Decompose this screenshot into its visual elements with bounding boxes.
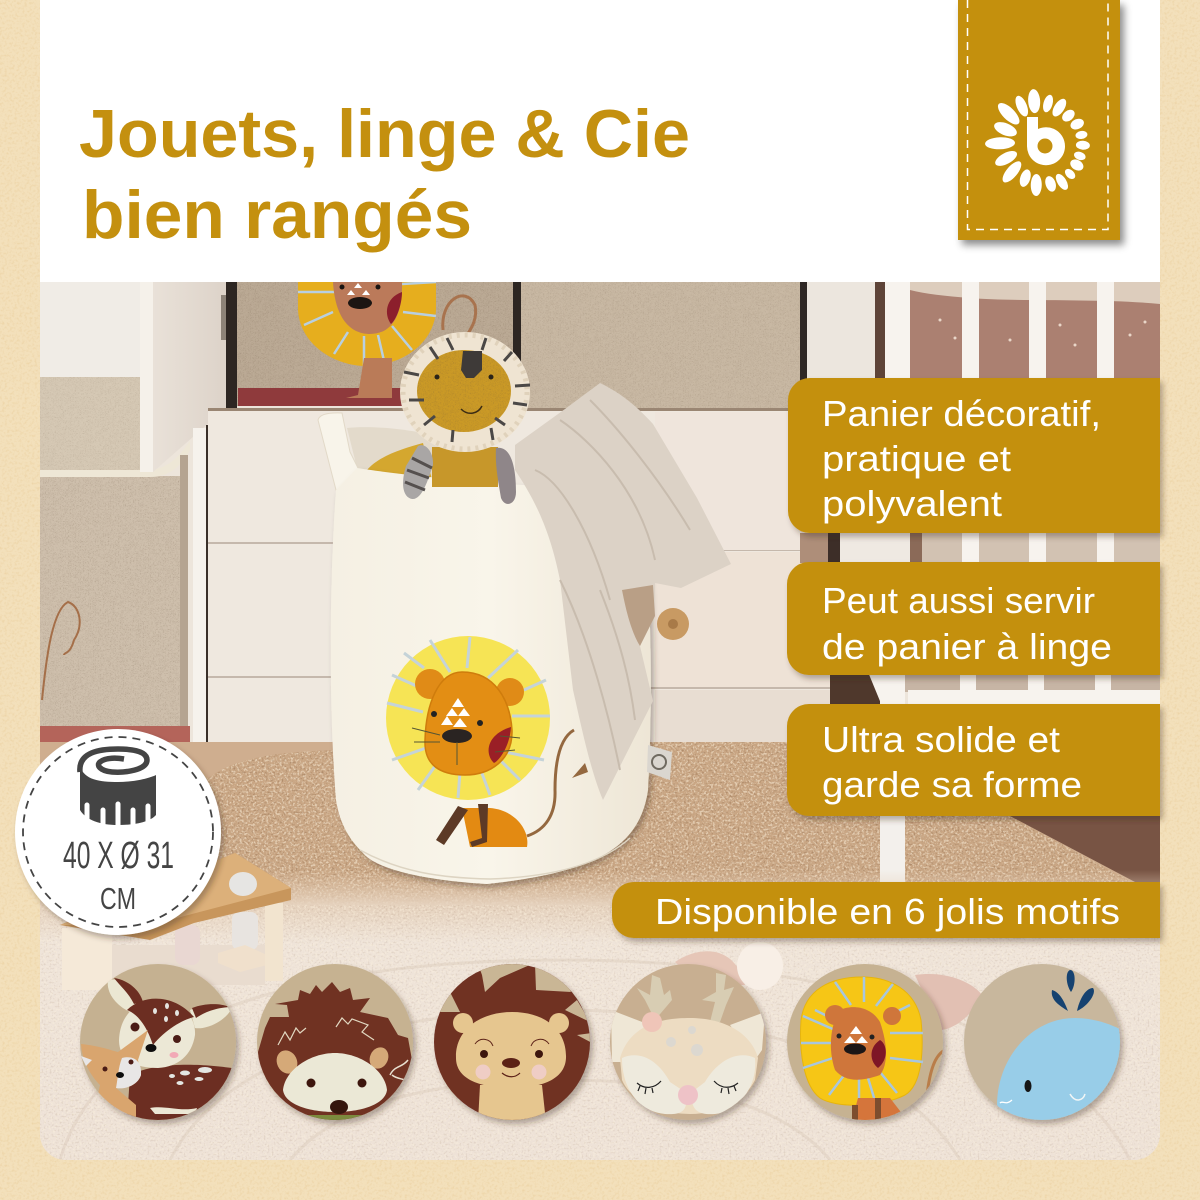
- crib leg: [880, 816, 905, 882]
- motifs row: [80, 964, 1122, 1122]
- basket lion face: [412, 669, 524, 775]
- wall and cabinet backdrop: [40, 406, 1160, 1160]
- dimensions text: CM: [100, 881, 136, 916]
- label: decorative: [788, 378, 1160, 533]
- top storage box with lion: [226, 282, 513, 408]
- jute rug: [40, 742, 1131, 914]
- label: six motifs: [612, 882, 1160, 938]
- wood floor: [40, 742, 1160, 882]
- wooden toy: [60, 853, 291, 990]
- motif: whale: [964, 964, 1122, 1122]
- label: six motifs: Disponible en 6 jolis motifs: [655, 891, 1120, 932]
- left cabinet interior: [40, 282, 140, 472]
- motif: fawn: [610, 964, 766, 1120]
- door panel: [140, 282, 227, 472]
- label: sturdy: [787, 704, 1160, 816]
- left fabric box: [40, 441, 190, 742]
- icon: measuring tape: [80, 749, 156, 826]
- white header band: [40, 0, 1160, 282]
- motif: hedgehog bear: [434, 964, 592, 1122]
- top right storage box: [513, 282, 807, 410]
- motif: lion: [787, 964, 945, 1122]
- label: sturdy: Ultra solide et: [822, 719, 1060, 760]
- label: decorative: Panier décoratif,: [822, 393, 1101, 434]
- cream round rug: [40, 870, 1160, 1160]
- basket lion mane: [386, 636, 550, 800]
- title: [79, 96, 690, 253]
- title: bien rangés: [82, 177, 472, 253]
- muslin blanket: [515, 383, 731, 800]
- right cabinet door and crib: [807, 282, 1170, 706]
- label: decorative: polyvalent: [822, 483, 1002, 524]
- feature labels: [612, 378, 1160, 938]
- logo tag: [958, 0, 1120, 240]
- dimensions text: [63, 835, 174, 916]
- dimensions text: 40 X Ø 31: [63, 835, 174, 877]
- label: laundry: [787, 562, 1160, 675]
- plush toy lion: [400, 332, 530, 504]
- dark floor wedge: [1010, 816, 1160, 882]
- basket: [318, 413, 651, 884]
- label: laundry: de panier à linge: [822, 626, 1112, 667]
- white drawers cabinet: [193, 408, 830, 745]
- basket label: [647, 745, 672, 780]
- photo: nursery scene: [40, 282, 1170, 1160]
- icon: sun logo: [985, 89, 1090, 196]
- motif: hedgehog: [257, 964, 413, 1121]
- motif: deer: [80, 964, 236, 1122]
- title: Jouets, linge & Cie: [79, 96, 690, 172]
- basket lion body and tail: [436, 730, 588, 847]
- dimensions badge: [15, 729, 221, 935]
- toy mushrooms: [675, 942, 982, 1030]
- label: laundry: Peut aussi servir: [822, 580, 1095, 621]
- label: sturdy: garde sa forme: [822, 764, 1082, 805]
- label: decorative: pratique et: [822, 438, 1011, 479]
